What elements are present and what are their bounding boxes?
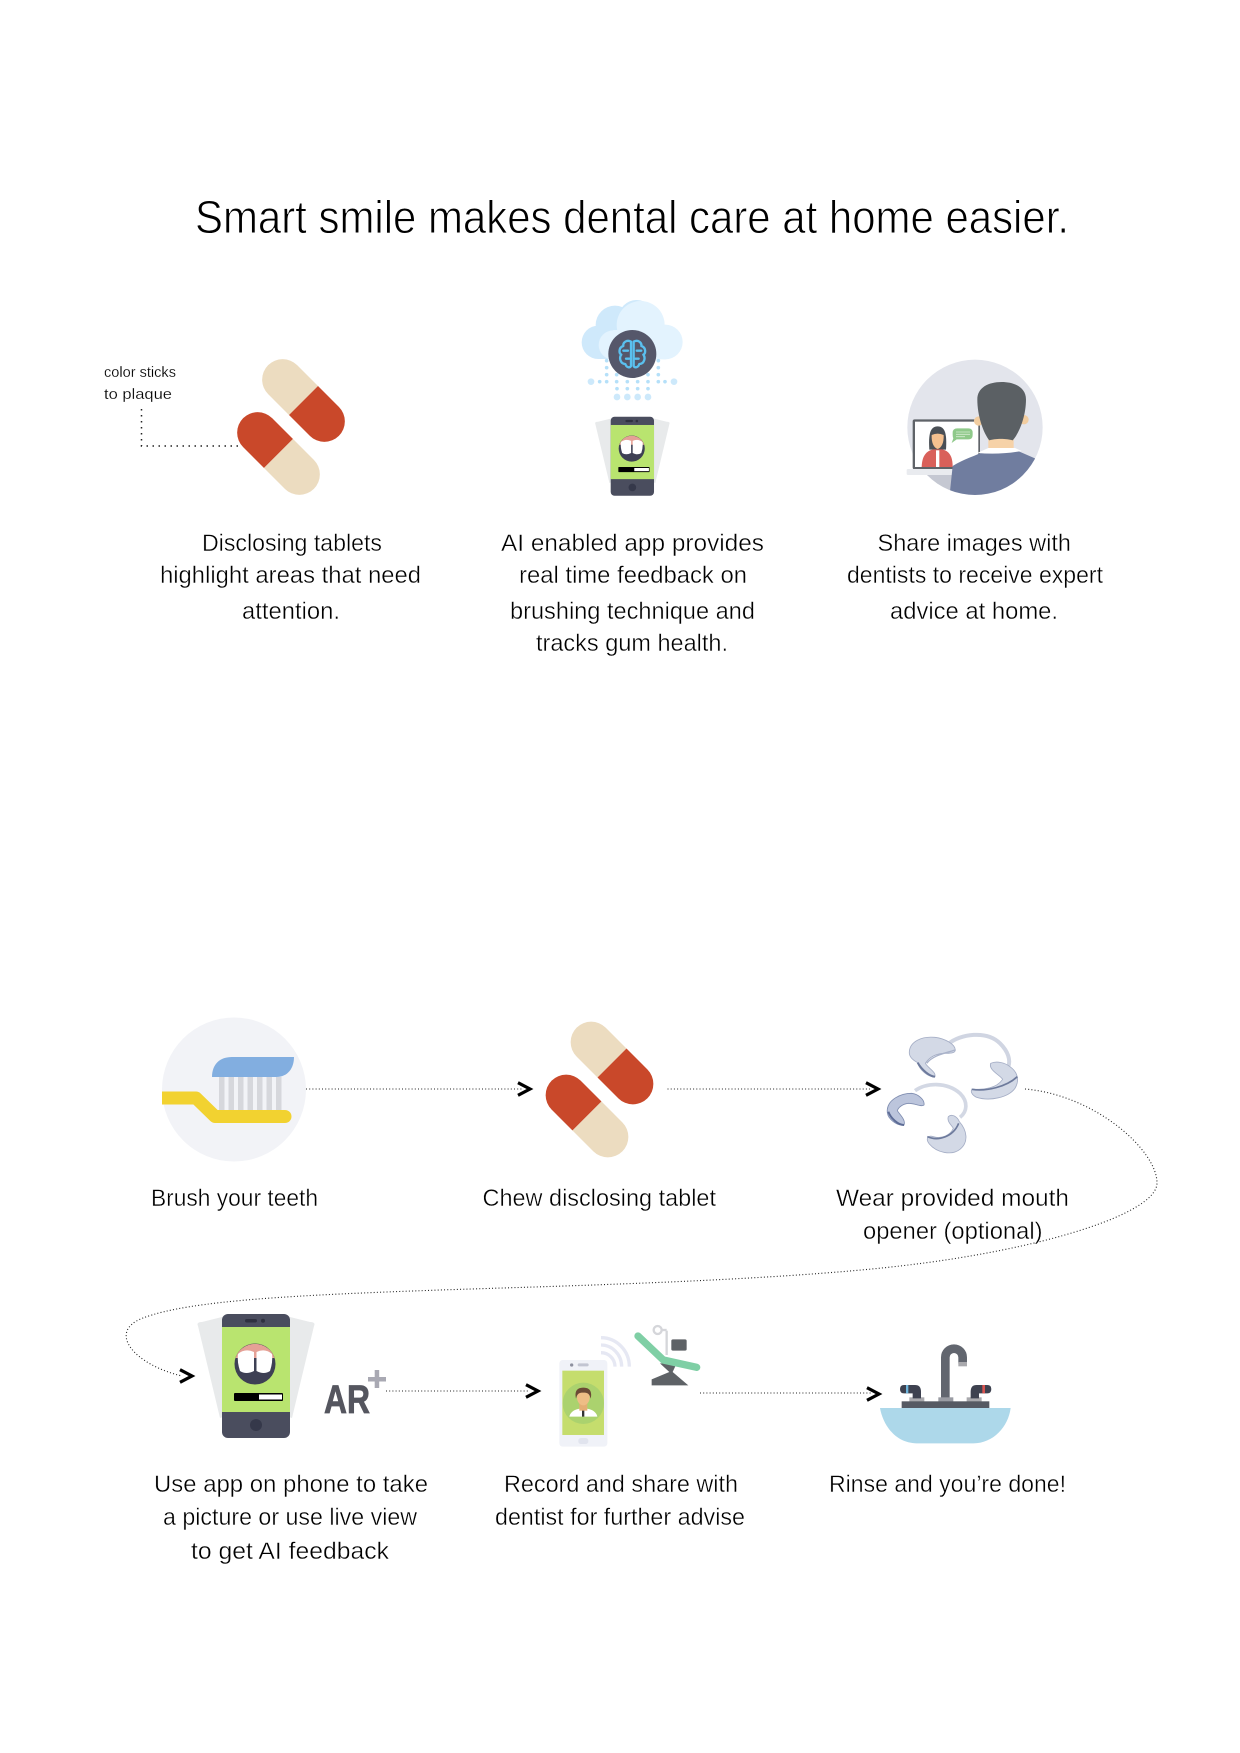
text: AI enabled app description: AI enabled app provides [501,530,764,557]
text: wear provided mouth opener: opener (optional) [863,1218,1042,1245]
icon: phone with teeth scan [198,1314,314,1438]
arrow: brush to tablet [306,1083,530,1095]
icon: video consult with dentist [907,360,1043,498]
text: disclosing tablets description: attention. [242,598,340,625]
text: wear provided mouth opener [836,1185,1069,1245]
text: AI enabled app description: real time feedback on [519,562,747,589]
step: rinse [829,1349,1066,1498]
step: chew disclosing tablet [482,1013,716,1212]
icon: AI cloud with brain [582,300,683,400]
callout: color sticks to plaque: color sticks [104,364,176,381]
text: share images description: dentists to receive expert [847,562,1103,589]
panel: share with dentists [847,360,1103,625]
text: share images description: Share images with [878,530,1071,557]
text: record and share: dentist for further advise [495,1504,745,1531]
text: record and share: Record and share with [504,1471,738,1498]
icon: AR plus: AR [324,1378,370,1422]
icon: sink [880,1349,1011,1443]
step: brush your teeth [151,1018,318,1212]
icon: disclosing tablets [537,1013,662,1166]
panel: AI enabled app [501,300,764,657]
arrow: curved connector between rows [126,1089,1157,1382]
text: disclosing tablets description [160,530,421,625]
text: use app on phone [154,1471,428,1565]
text: brush your teeth: Brush your teeth [151,1185,318,1212]
text: share images description: advice at home. [890,598,1058,625]
text: wear provided mouth opener: Wear provided mouth [836,1185,1069,1212]
icon: disclosing tablets [229,351,353,503]
text: rinse and done: Rinse and you’re done! [829,1471,1066,1498]
text: AI enabled app description: tracks gum health. [536,630,728,657]
text: use app on phone: a picture or use live view [163,1504,418,1531]
text: share images description [847,530,1103,625]
text: disclosing tablets description: highlight areas that need [160,562,421,589]
text: use app on phone: to get AI feedback [191,1538,390,1565]
step: record and share [495,1326,745,1531]
icon: phone with teeth scan [595,417,670,496]
title: Smart smile makes dental care at home easier. [195,191,1069,243]
arrow: tablet to mouth opener [668,1083,878,1095]
icon: phone and dental chair [559,1326,697,1447]
step: wear mouth opener [836,1035,1069,1245]
arrow: record to rinse [700,1388,879,1400]
callout: color sticks to plaque [104,364,240,446]
icon: mouth openers [887,1035,1018,1153]
text: use app on phone: Use app on phone to take [154,1471,428,1498]
text: AI enabled app description [501,530,764,657]
callout: color sticks to plaque: to plaque [104,386,172,403]
text: disclosing tablets description: Disclosing tablets [202,530,382,557]
panel: disclosing tablets [104,351,421,625]
step: use app on phone [154,1314,428,1565]
arrow: AR to record [386,1385,538,1397]
text: record and share [495,1471,745,1531]
text: chew disclosing tablet: Chew disclosing tablet [482,1185,716,1212]
text: AI enabled app description: brushing technique and [510,598,755,625]
icon: toothbrush [162,1018,306,1162]
